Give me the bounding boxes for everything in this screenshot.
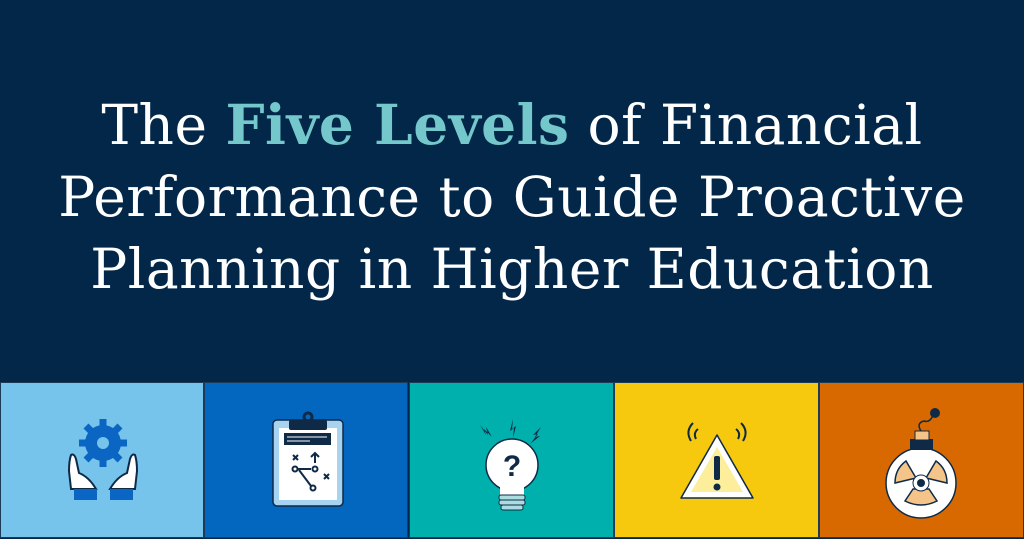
panel: hands with gear xyxy=(0,382,204,538)
icon: warning triangle xyxy=(681,423,753,498)
icon: lightning xyxy=(480,419,541,444)
title: The Five Levels of Financial xyxy=(101,92,923,157)
icon: clipboard xyxy=(273,413,343,506)
panel: clipboard xyxy=(204,382,408,538)
icon: hands xyxy=(69,454,137,489)
panel: bomb xyxy=(819,382,1024,538)
title: Performance to Guide Proactive xyxy=(58,165,966,229)
title xyxy=(58,92,966,301)
icon: gear xyxy=(79,419,127,467)
icon: bomb xyxy=(886,408,956,518)
panel: lightbulb xyxy=(409,382,614,538)
icon: bulb xyxy=(486,439,538,510)
panel: warning xyxy=(614,382,819,538)
icon: bulb: ? xyxy=(503,450,521,483)
title: Planning in Higher Education xyxy=(90,237,934,301)
